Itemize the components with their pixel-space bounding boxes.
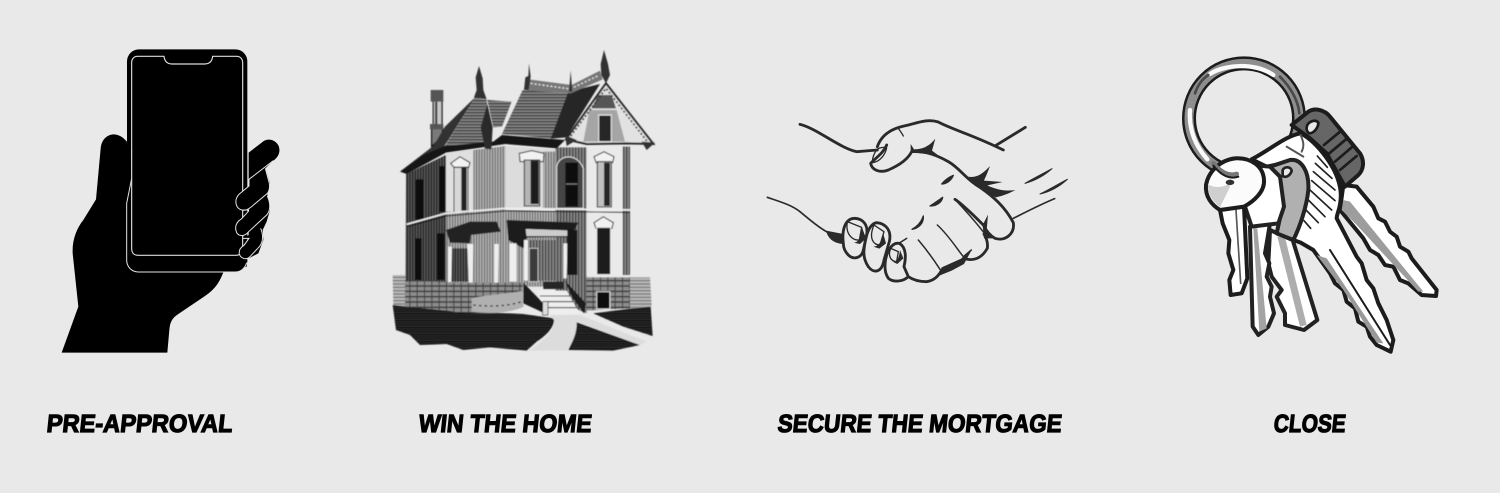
main roof bbox=[400, 84, 600, 174]
second key bbox=[1245, 165, 1284, 335]
thumb nail bbox=[873, 147, 887, 163]
upper floor windows bbox=[407, 115, 630, 227]
key ring bbox=[1189, 63, 1299, 173]
chimney bbox=[430, 90, 443, 147]
roof crest and finials bbox=[474, 50, 610, 99]
upper hand outline bbox=[800, 121, 1025, 239]
curled fingers bbox=[843, 218, 908, 281]
right tower wall bbox=[587, 147, 630, 275]
dormer bbox=[481, 104, 493, 149]
left porch bbox=[446, 222, 501, 243]
palm marks bbox=[912, 175, 953, 229]
illustration: victorian house bbox=[393, 50, 655, 351]
illustration: handshake bbox=[767, 121, 1067, 282]
large hatched key bbox=[1252, 133, 1393, 352]
ground and lawn bbox=[393, 275, 653, 351]
center wall bbox=[505, 146, 555, 210]
phone body bbox=[127, 49, 247, 272]
wrist lines bbox=[1025, 169, 1067, 194]
icon: hand holding phone bbox=[62, 49, 279, 353]
left wing wall bbox=[405, 155, 448, 311]
stone foundation and stairs bbox=[405, 277, 630, 315]
label: secure the mortgage: SECURE THE MORTGAGE bbox=[776, 410, 1063, 438]
label: win the home: WIN THE HOME bbox=[417, 410, 593, 438]
illustration: bunch of keys bbox=[1189, 63, 1437, 352]
phone lower outline bbox=[127, 150, 247, 272]
phone screen with notch bbox=[132, 56, 243, 255]
lower floor windows and porch bbox=[415, 217, 613, 283]
upper hand shadow bbox=[911, 139, 1015, 197]
back key bbox=[1292, 110, 1437, 296]
label: close: CLOSE bbox=[1272, 410, 1347, 438]
lower arm outline bbox=[767, 197, 828, 233]
finger creases bbox=[900, 199, 984, 269]
floor band bbox=[407, 208, 630, 224]
upper thumb crease bbox=[898, 128, 903, 136]
grey key bbox=[1268, 160, 1317, 330]
front left wall bbox=[446, 146, 505, 283]
door porch bbox=[507, 220, 578, 248]
gable bbox=[565, 83, 655, 150]
fingers bbox=[236, 140, 279, 259]
bay wall under gable bbox=[555, 147, 587, 313]
front key bbox=[1206, 158, 1264, 295]
walkway bbox=[528, 315, 647, 351]
knuckles bbox=[908, 234, 988, 282]
label: pre-approval: PRE-APPROVAL bbox=[45, 410, 234, 438]
hand silhouette bbox=[62, 134, 247, 353]
